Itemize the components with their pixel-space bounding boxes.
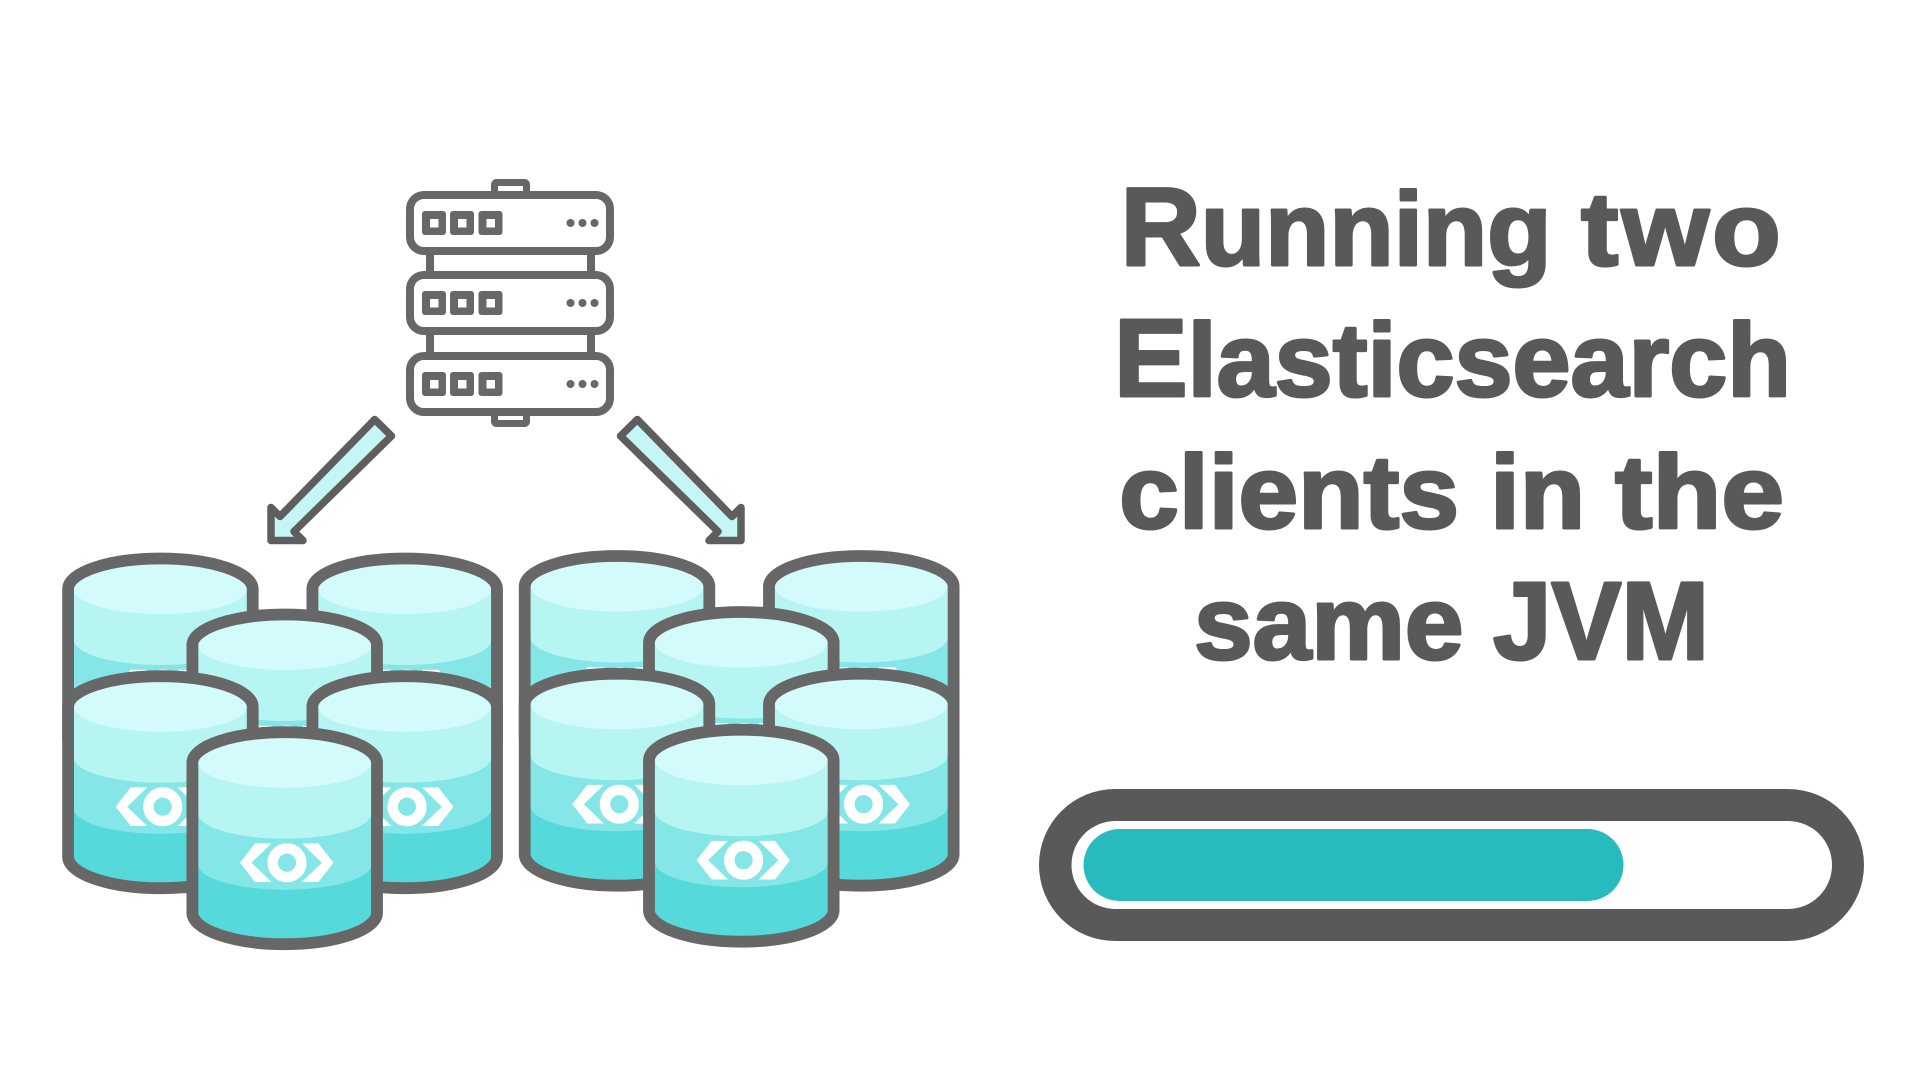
server unit 3 — [410, 356, 610, 412]
title line 3: clients — [1119, 435, 1459, 551]
left database cluster — [68, 558, 497, 944]
title line 1 — [1120, 166, 1784, 289]
progress bar frame — [1039, 789, 1864, 941]
title line 4: JVM — [1493, 560, 1709, 683]
server connectors — [430, 251, 591, 356]
title line 4 — [1194, 560, 1709, 683]
progress bar — [1039, 789, 1864, 941]
server unit 2 — [410, 275, 610, 331]
title — [1114, 166, 1791, 683]
database back left — [525, 556, 709, 768]
title line 2: Elasticsearch — [1114, 297, 1791, 420]
database front right — [312, 676, 497, 888]
database back left — [68, 558, 253, 770]
progress bar fill — [1084, 829, 1624, 901]
database front centre — [192, 732, 377, 944]
database back right — [312, 558, 497, 770]
database back centre — [192, 614, 377, 826]
title line 3: the — [1615, 435, 1784, 551]
database front centre — [649, 730, 834, 942]
right database cluster — [525, 556, 954, 942]
server unit 1 — [410, 195, 610, 251]
database front left — [525, 674, 709, 886]
title line 3: in — [1490, 435, 1585, 551]
icon: server rack — [410, 182, 610, 424]
server bottom nub — [494, 408, 526, 424]
title line 1: Running — [1120, 166, 1552, 289]
progress bar track — [1072, 821, 1832, 909]
database back right — [769, 556, 954, 768]
database front right — [769, 674, 954, 886]
arrow: server to right cluster — [620, 420, 741, 540]
title line 3 — [1119, 435, 1784, 551]
database back centre — [649, 612, 834, 824]
server top nub — [494, 182, 526, 198]
database front left — [68, 676, 253, 888]
title line 1: two — [1581, 172, 1784, 288]
title line 4: same — [1194, 566, 1464, 682]
arrow: server to left cluster — [271, 420, 392, 540]
